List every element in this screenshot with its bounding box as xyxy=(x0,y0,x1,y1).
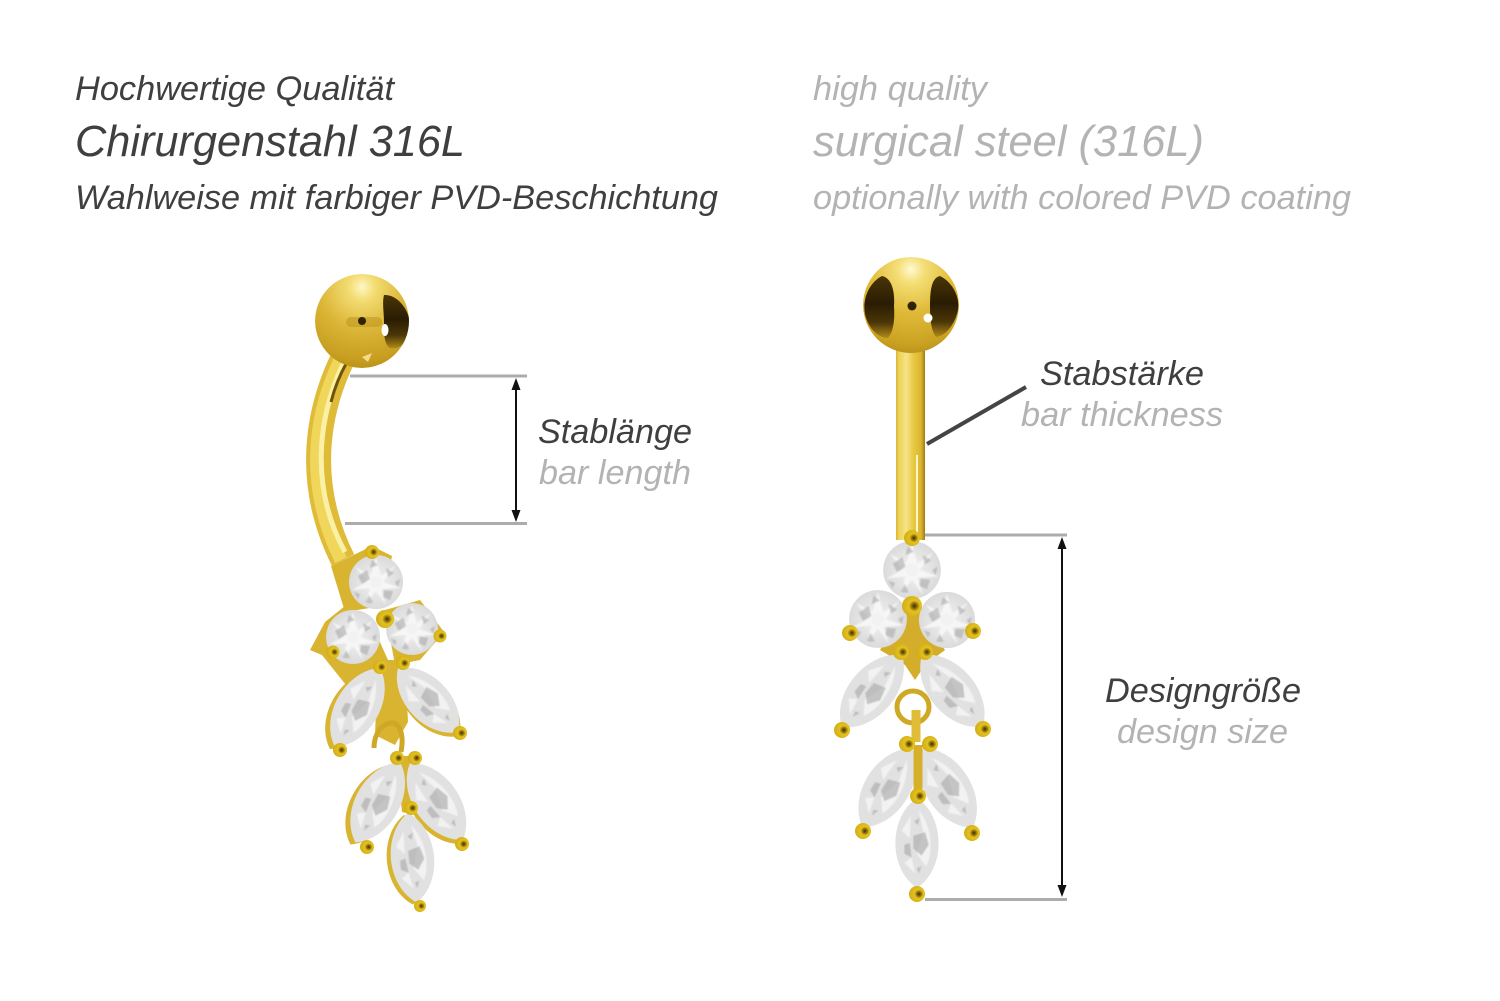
heading: English product title: high quality xyxy=(813,70,989,108)
product: curved belly bar jewel (left) xyxy=(310,274,481,912)
curved bar xyxy=(317,358,347,560)
straight bar xyxy=(896,348,925,540)
product: straight front view jewel (right) xyxy=(834,257,991,902)
label: design size: design size xyxy=(1117,713,1288,751)
heading: English product title: surgical steel (316L) xyxy=(813,117,1204,166)
dimension: bar length lines and arrow xyxy=(345,374,527,525)
link ring xyxy=(374,723,402,752)
dimension: bar thickness pointer line xyxy=(927,387,1026,444)
heading: German product title: Hochwertige Qualität xyxy=(75,70,396,108)
heading: English product title: optionally with colored PVD coating xyxy=(813,179,1351,217)
label: bar thickness xyxy=(1021,355,1223,434)
top ball xyxy=(315,274,410,368)
heading: German product title: Chirurgenstahl 316L xyxy=(75,117,465,166)
stones xyxy=(316,555,481,905)
link ring and stem xyxy=(897,691,929,796)
heading: German product title xyxy=(75,70,718,217)
top ball xyxy=(863,257,959,353)
label: bar thickness: bar thickness xyxy=(1021,396,1223,434)
prongs xyxy=(326,545,469,912)
label: bar length: bar length xyxy=(539,454,691,492)
label: bar length: Stablänge xyxy=(538,413,692,451)
label: bar thickness: Stabstärke xyxy=(1040,355,1204,393)
label: design size: Designgröße xyxy=(1105,672,1301,710)
heading: English product title xyxy=(813,70,1351,217)
gold setting back xyxy=(310,546,479,907)
stones xyxy=(824,541,1000,888)
dimension: design size lines and arrow xyxy=(925,534,1067,901)
heading: German product title: Wahlweise mit farbiger PVD-Beschichtung xyxy=(75,179,718,217)
prongs xyxy=(834,530,991,902)
label: design size xyxy=(1105,672,1301,751)
gold setting back xyxy=(880,600,945,680)
label: bar length xyxy=(538,413,692,492)
